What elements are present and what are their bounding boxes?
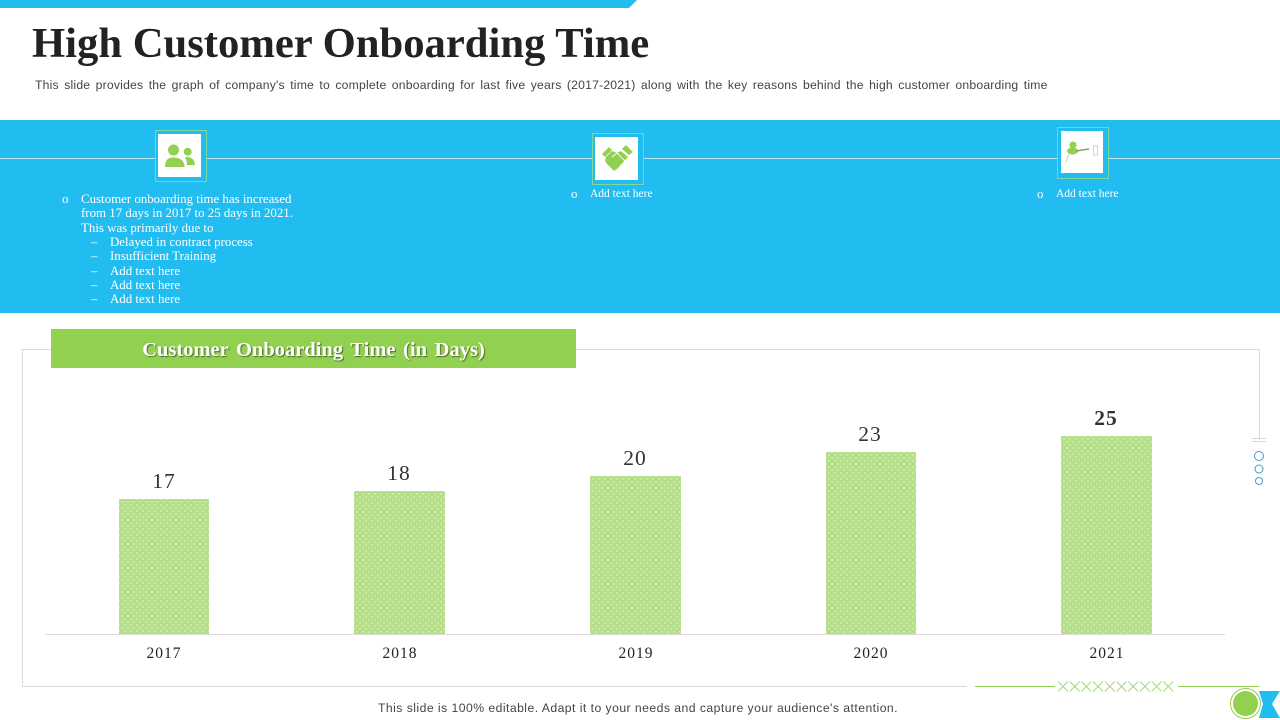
title: High Customer Onboarding Time xyxy=(32,20,649,67)
top accent bar xyxy=(0,0,637,8)
text block: left reasons: Delayed in contract process xyxy=(110,235,253,249)
bar 2019 xyxy=(590,476,681,634)
icon: transfer to phone xyxy=(1057,127,1109,179)
text block: left reasons: Insufficient Training xyxy=(110,249,216,263)
bar 2018 xyxy=(354,491,445,634)
chart heading: Customer Onboarding Time (in Days) xyxy=(142,339,485,361)
text block: left reasons: Add text here xyxy=(110,264,180,278)
text block: left reasons: Add text here xyxy=(110,278,180,292)
text block: left reasons: from 17 days in 2017 to 25 days in 2021. xyxy=(81,206,293,220)
text block: left reasons xyxy=(62,192,293,306)
text block: left reasons: – xyxy=(91,278,97,292)
year 2020: 2020 xyxy=(854,645,888,662)
footer note: This slide is 100% editable. Adapt it to your needs and capture your audience's attention. xyxy=(378,701,898,715)
icon: ribbon and green circle xyxy=(1230,688,1280,719)
timeline line xyxy=(0,158,1280,159)
subtitle: This slide provides the graph of company's time to complete onboarding for last five years (2017-2021) along with the key reasons behind the high customer onboarding time xyxy=(35,78,1048,92)
text block: middle: Add text here xyxy=(590,188,653,200)
value 20: 20 xyxy=(623,446,647,470)
year 2019: 2019 xyxy=(618,645,654,662)
text block: right: Add text here xyxy=(1056,188,1119,200)
text block: left reasons: This was primarily due to xyxy=(81,221,213,235)
text block: left reasons: o xyxy=(62,192,68,206)
icon: side circles xyxy=(1254,451,1264,485)
text block: middle xyxy=(571,187,653,201)
bar 2017 xyxy=(119,499,209,634)
axis xyxy=(45,634,1225,635)
text block: left reasons: – xyxy=(91,264,97,278)
text block: right: o xyxy=(1037,187,1043,201)
year 2018: 2018 xyxy=(382,645,418,662)
text block: right xyxy=(1037,187,1119,201)
decorative ornament: line and crosses xyxy=(975,681,1259,692)
panel: key reasons xyxy=(0,120,1280,313)
chart heading xyxy=(51,329,576,368)
text block: left reasons: Add text here xyxy=(110,292,180,306)
bar 2020 xyxy=(826,452,916,634)
text block: left reasons: – xyxy=(91,235,97,249)
bar 2021 xyxy=(1061,436,1152,634)
value 18: 18 xyxy=(387,461,411,485)
icon: people xyxy=(155,130,207,182)
icon: handshake xyxy=(592,133,644,185)
text block: middle: o xyxy=(571,187,577,201)
text block: left reasons: Customer onboarding time has increased xyxy=(81,192,292,206)
text block: left reasons: – xyxy=(91,249,97,263)
text block: left reasons: – xyxy=(91,292,97,306)
value 17: 17 xyxy=(152,469,176,493)
year 2017: 2017 xyxy=(146,645,182,662)
value 23: 23 xyxy=(858,422,882,446)
value 25: 25 xyxy=(1094,406,1118,430)
bar chart xyxy=(45,406,1225,662)
year 2021: 2021 xyxy=(1090,645,1124,662)
